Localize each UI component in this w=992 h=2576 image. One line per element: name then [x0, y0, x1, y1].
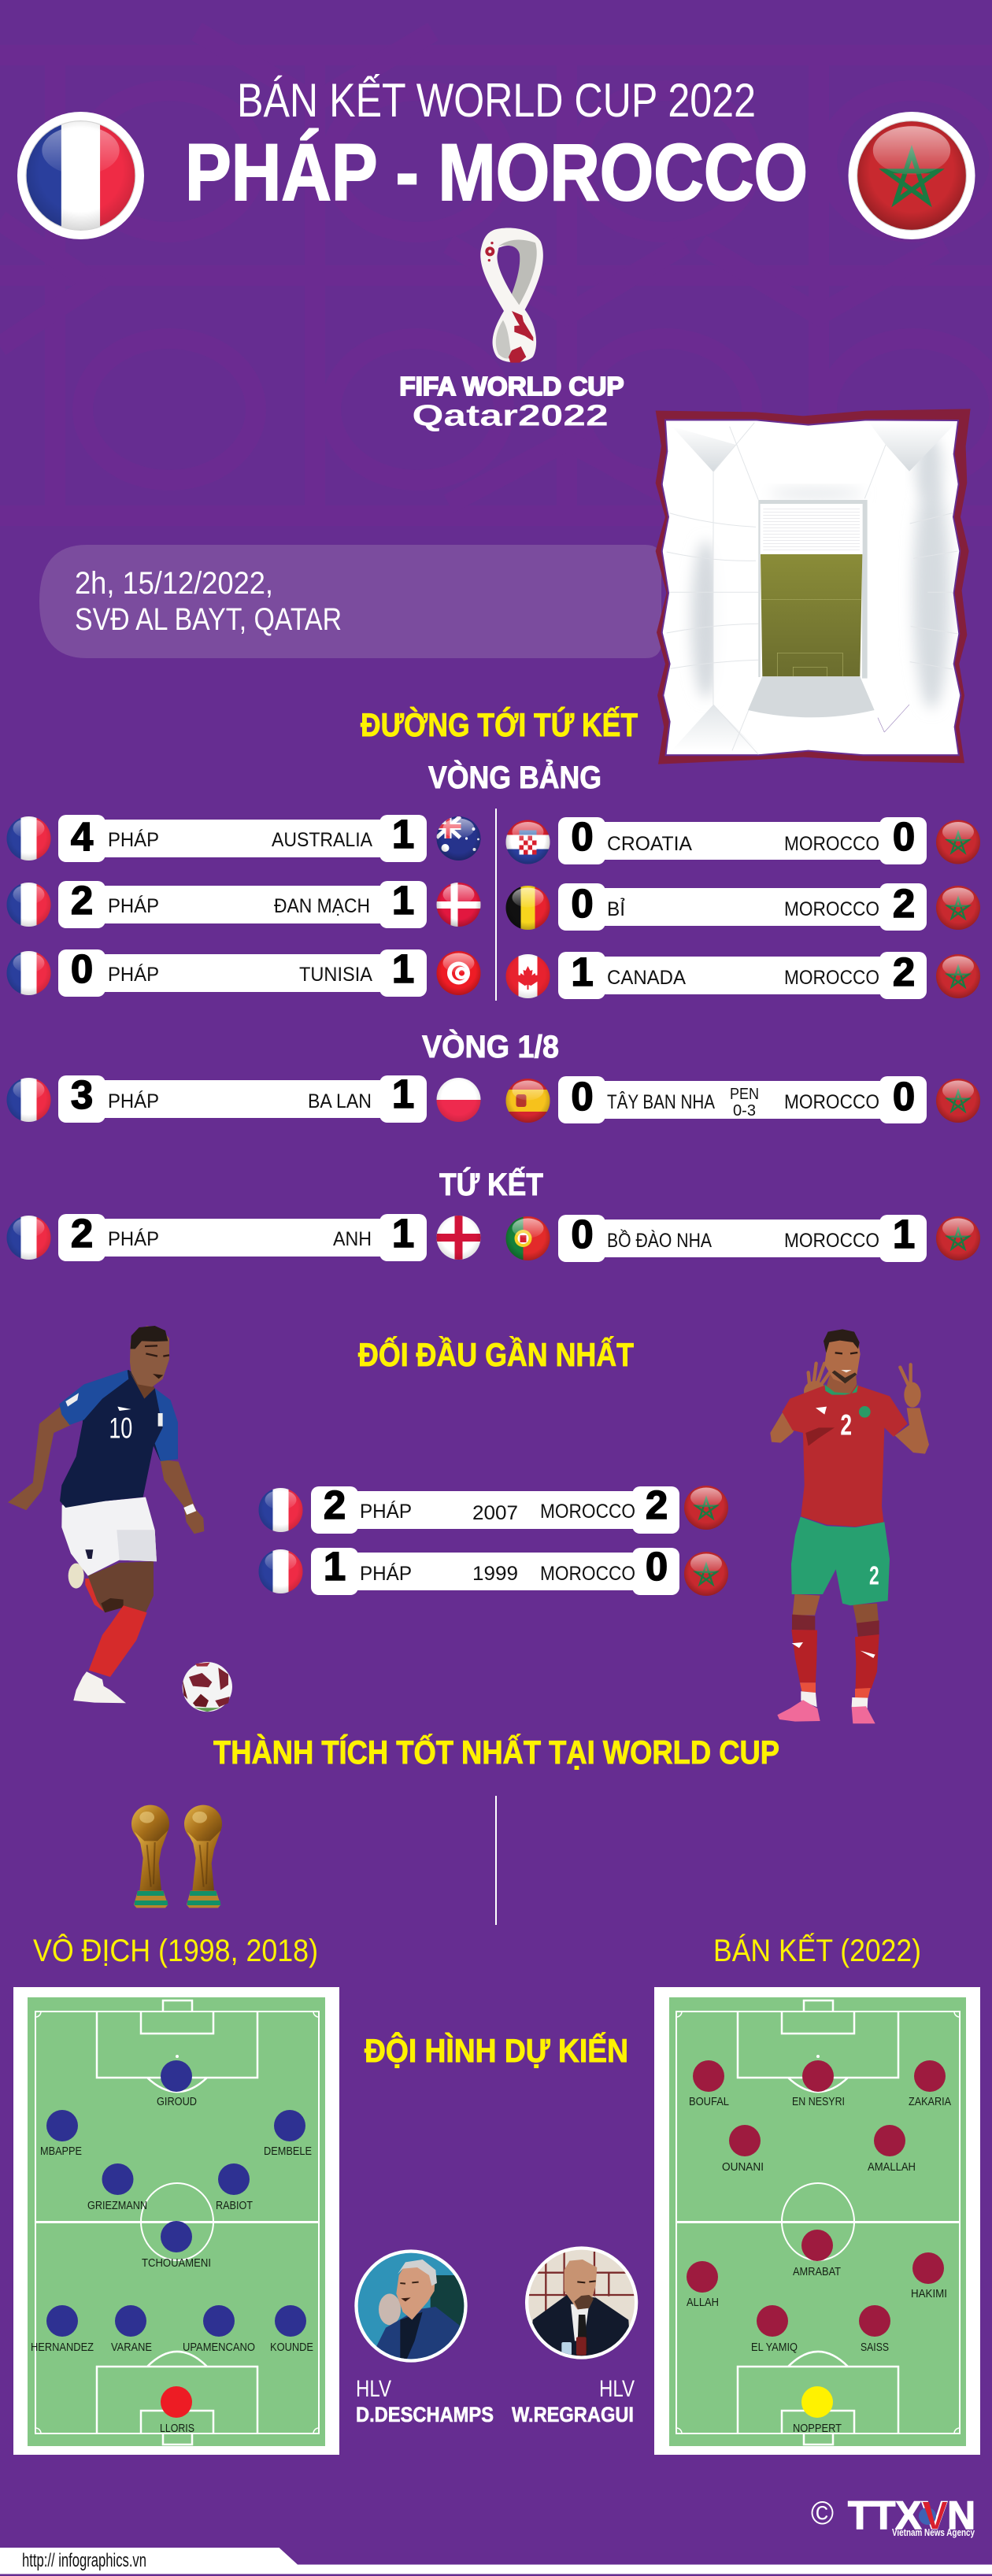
player names: France: KOUNDE: [270, 2341, 313, 2354]
player names: Morocco: BOUFAL: [689, 2095, 729, 2108]
match: Spain 0-0 Morocco, penalties 0-3: [505, 1074, 980, 1123]
heading: recent head-to-head: ĐỐI ĐẦU GẦN NHẤT: [358, 1335, 634, 1373]
match: France 0-1 Tunisia: [6, 946, 480, 997]
text: Morocco best result: BÁN KẾT (2022): [713, 1932, 921, 1968]
divider: [495, 809, 497, 1001]
match: Croatia 0-0 Morocco: MOROCCO: [784, 833, 879, 855]
match: head-to-head 1999: PHÁP: [360, 1562, 412, 1585]
heading: road to quarter-finals: ĐƯỜNG TỚI TỨ KẾT: [361, 705, 638, 743]
photo: coach Regragui: [525, 2246, 638, 2359]
title: main: PHÁP - MOROCCO: [185, 128, 808, 217]
player names: Morocco: OUNANI: [722, 2160, 764, 2174]
website address: http:// infographics.vn: [22, 2550, 146, 2571]
player names: France: GIROUD: [157, 2095, 197, 2108]
player names: France: HERNANDEZ: [31, 2341, 94, 2354]
players: France: [46, 2060, 306, 2418]
match: France 4-1 Australia: PHÁP: [108, 828, 159, 851]
player names: France: TCHOUAMENI: [142, 2256, 211, 2270]
match: France 0-1 Tunisia: 0: [71, 946, 93, 991]
match: Belgium 0-2 Morocco: MOROCCO: [784, 898, 879, 920]
player names: France: DEMBELE: [264, 2145, 312, 2158]
date: 2h, 15/12/2022,: [75, 566, 273, 601]
match: Portugal 0-1 Morocco: 1: [893, 1212, 915, 1257]
match: Portugal 0-1 Morocco: MOROCCO: [784, 1230, 879, 1252]
match: France 2-1 Denmark: [6, 878, 480, 928]
player names: Morocco: EL YAMIQ: [751, 2341, 798, 2354]
match: France 2-1 Denmark: 1: [392, 878, 414, 923]
panel: date and venue: [39, 545, 661, 658]
heading: quarter-finals: TỨ KẾT: [439, 1166, 543, 1202]
match: Croatia 0-0 Morocco: CROATIA: [607, 833, 692, 855]
match: France 2-1 England: 2: [71, 1211, 93, 1256]
match: Canada 1-2 Morocco: [505, 949, 980, 999]
match: Spain 0-0 Morocco, penalties 0-3: PEN: [730, 1086, 759, 1103]
match: France 2-1 Denmark: PHÁP: [108, 894, 159, 917]
match: France 3-1 Poland: [6, 1071, 480, 1123]
player names: Morocco: [687, 2095, 951, 2435]
match: head-to-head 1999: [258, 1544, 728, 1596]
match: head-to-head 1999: MOROCCO: [540, 1563, 635, 1585]
divider: [495, 1796, 497, 1925]
text: Morocco coach title: HLV: [599, 2376, 635, 2402]
icon: large Morocco flag: [849, 112, 975, 239]
match: Belgium 0-2 Morocco: 0: [571, 881, 594, 926]
illustration: football: [183, 1662, 232, 1712]
emblem: [480, 228, 543, 363]
match: Portugal 0-1 Morocco: 0: [571, 1212, 594, 1257]
logo: TTXVN copyright: [811, 2493, 975, 2538]
player names: Morocco: ZAKARIA: [909, 2095, 951, 2108]
background pattern: [0, 31, 992, 520]
title: subtitle: BÁN KẾT WORLD CUP 2022: [237, 74, 756, 127]
player names: Morocco: ALLAH: [687, 2296, 719, 2309]
match: head-to-head 1999: 1: [324, 1544, 346, 1589]
match: France 4-1 Australia: AUSTRALIA: [272, 829, 372, 851]
match: Croatia 0-0 Morocco: 0: [571, 814, 594, 859]
logo: FIFA World Cup Qatar 2022: [399, 228, 624, 433]
illustration: Morocco player: 2: [869, 1562, 879, 1591]
match: head-to-head 2007: [258, 1482, 728, 1534]
match: Belgium 0-2 Morocco: [505, 881, 980, 931]
match: France 2-1 England: ANH: [333, 1228, 372, 1250]
match: head-to-head 2007: 2007: [472, 1502, 518, 1524]
players: Morocco: [687, 2060, 946, 2418]
match: Spain 0-0 Morocco, penalties 0-3: MOROCCO: [784, 1091, 879, 1113]
player names: Morocco: EN NESYRI: [792, 2095, 845, 2108]
heading: group stage: VÒNG BẢNG: [428, 759, 601, 795]
illustration: Morocco player: [770, 1329, 929, 1723]
match: France 3-1 Poland: 3: [71, 1072, 93, 1117]
player names: France: VARANE: [111, 2341, 152, 2354]
panel: Morocco lineup: [654, 1987, 980, 2455]
panel: France lineup: [13, 1987, 339, 2455]
match: Belgium 0-2 Morocco: BỈ: [607, 897, 625, 920]
match: Spain 0-0 Morocco, penalties 0-3: 0-3: [733, 1102, 756, 1120]
match: France 0-1 Tunisia: PHÁP: [108, 963, 159, 986]
match: head-to-head 2007: MOROCCO: [540, 1501, 635, 1523]
match: France 0-1 Tunisia: 1: [392, 946, 414, 991]
match: France 3-1 Poland: PHÁP: [108, 1090, 159, 1112]
match: France 2-1 Denmark: 2: [71, 878, 93, 923]
text: France coach title: HLV: [356, 2376, 391, 2402]
text: France coach name: D.DESCHAMPS: [356, 2403, 494, 2426]
match: Canada 1-2 Morocco: 1: [571, 949, 594, 994]
player names: France: [31, 2095, 313, 2435]
match: Spain 0-0 Morocco, penalties 0-3: 0: [571, 1074, 594, 1119]
match: Spain 0-0 Morocco, penalties 0-3: 0: [893, 1074, 915, 1119]
match: head-to-head 2007: 2: [324, 1482, 346, 1527]
illustration: France player: [8, 1326, 204, 1703]
player names: Morocco: HAKIMI: [911, 2287, 947, 2300]
player names: Morocco: AMALLAH: [868, 2160, 916, 2174]
match: head-to-head 1999: 0: [646, 1544, 668, 1589]
match: France 2-1 England: PHÁP: [108, 1227, 159, 1250]
player names: France: RABIOT: [216, 2199, 253, 2212]
match: France 2-1 Denmark: ĐAN MẠCH: [274, 895, 370, 917]
footer band: [0, 2548, 992, 2574]
text: France best result: VÔ ĐỊCH (1998, 2018): [33, 1933, 318, 1968]
match: Canada 1-2 Morocco: 2: [893, 949, 915, 994]
match: France 4-1 Australia: 1: [392, 812, 414, 857]
player names: Morocco: AMRABAT: [793, 2265, 841, 2278]
match: France 4-1 Australia: 4: [71, 814, 94, 859]
illustration: Morocco player: 2: [840, 1409, 852, 1442]
match: Canada 1-2 Morocco: CANADA: [607, 967, 686, 989]
heading: round of 16: VÒNG 1/8: [422, 1028, 559, 1064]
venue: SVĐ AL BAYT, QATAR: [75, 602, 342, 637]
icon: two World Cup trophies: [131, 1805, 222, 1908]
match: Canada 1-2 Morocco: MOROCCO: [784, 967, 879, 989]
heading: expected lineups: ĐỘI HÌNH DỰ KIẾN: [365, 2031, 628, 2069]
copyright symbol: ©: [811, 2494, 834, 2531]
match: France 3-1 Poland: 1: [392, 1071, 414, 1116]
player names: France: UPAMENCANO: [183, 2341, 255, 2354]
match: Croatia 0-0 Morocco: [505, 814, 980, 864]
match: head-to-head 1999: 1999: [472, 1563, 518, 1585]
match: Belgium 0-2 Morocco: 2: [893, 881, 915, 926]
match: France 4-1 Australia: [6, 812, 480, 862]
photo: coach Deschamps: [354, 2249, 470, 2363]
match: France 0-1 Tunisia: TUNISIA: [299, 964, 372, 986]
player names: France: LLORIS: [160, 2422, 194, 2435]
match: Portugal 0-1 Morocco: [505, 1212, 980, 1262]
icon: large France flag: [17, 112, 144, 239]
match: France 2-1 England: [6, 1211, 480, 1261]
logo text: Qatar 2022: Qatar2022: [412, 399, 609, 433]
match: head-to-head 2007: PHÁP: [360, 1500, 412, 1523]
match: Portugal 0-1 Morocco: BỒ ĐÀO NHA: [607, 1228, 712, 1252]
player names: Morocco: NOPPERT: [793, 2422, 842, 2435]
player names: France: GRIEZMANN: [87, 2199, 147, 2212]
player names: Morocco: SAISS: [861, 2341, 889, 2354]
match: Spain 0-0 Morocco, penalties 0-3: TÂY BAN NHA: [607, 1090, 715, 1113]
match: head-to-head 2007: 2: [646, 1482, 668, 1527]
logo text: FIFA WORLD CUP: [399, 372, 624, 402]
match: France 2-1 England: 1: [392, 1211, 414, 1256]
player names: France: MBAPPE: [40, 2145, 82, 2158]
match: Croatia 0-0 Morocco: 0: [893, 814, 915, 859]
illustration: France player: 10: [109, 1412, 132, 1445]
text: Morocco coach name: W.REGRAGUI: [512, 2403, 634, 2426]
heading: best World Cup achievement: THÀNH TÍCH TỐT NHẤT TẠI WORLD CUP: [213, 1733, 779, 1771]
agency name: TTXVN: [848, 2493, 975, 2537]
illustration: Al Bayt stadium: [656, 409, 971, 764]
match: France 3-1 Poland: BA LAN: [308, 1090, 372, 1112]
